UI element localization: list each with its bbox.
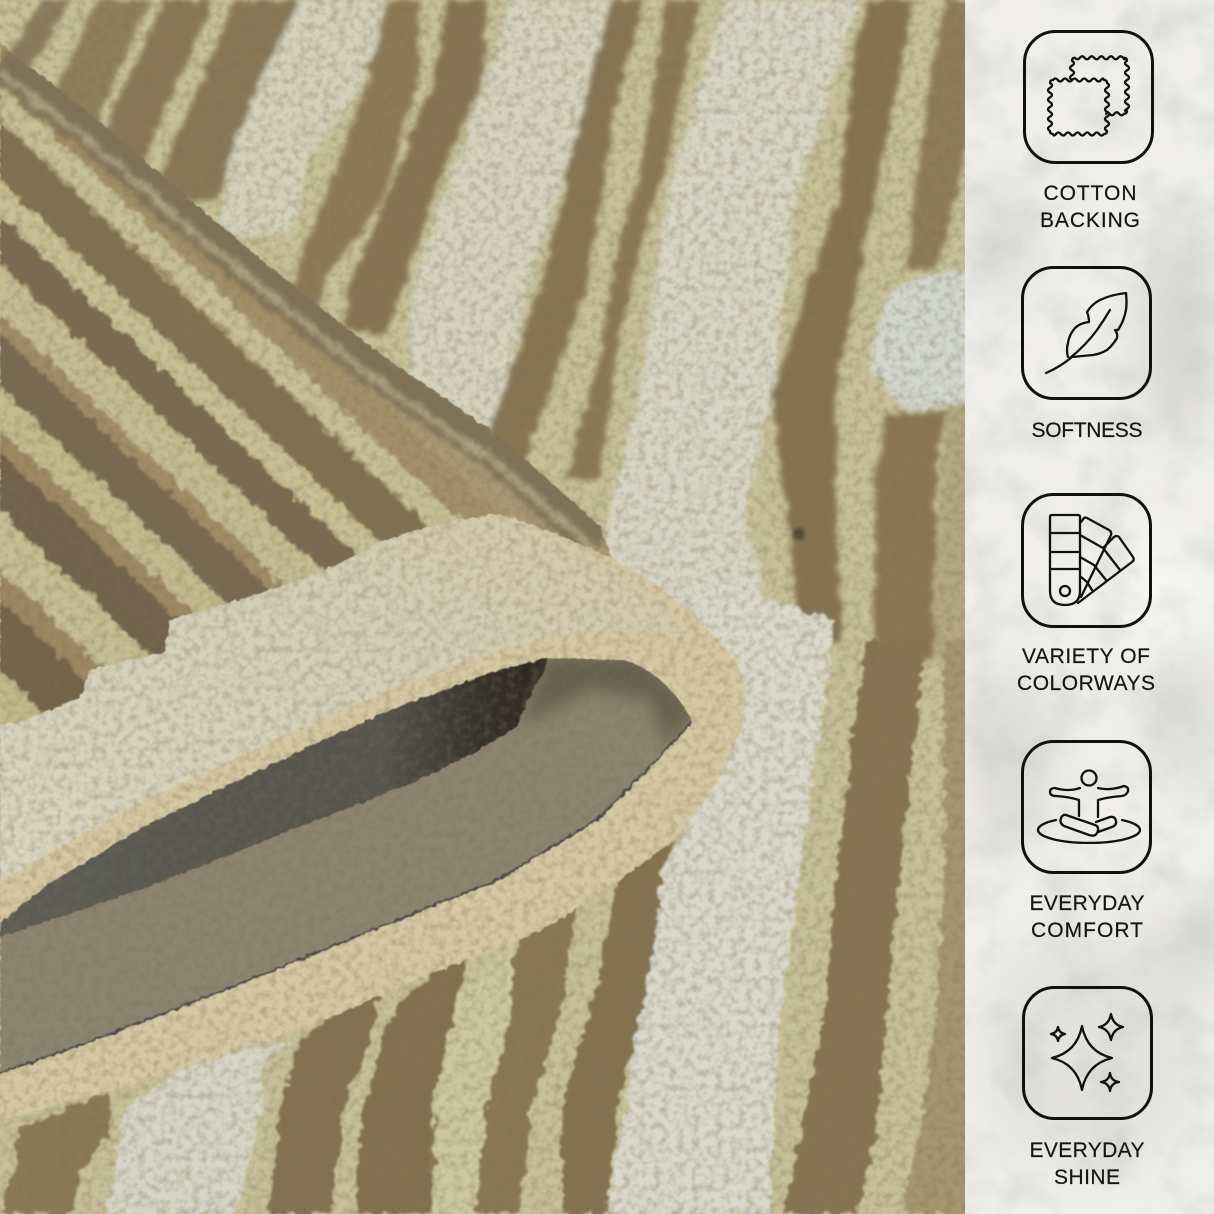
shade inside roll — [520, 655, 700, 745]
wool grain overlay — [0, 0, 965, 1214]
feature: everyday shine — [1024, 988, 1152, 1189]
label: variety of colorways: VARIETY OF — [1022, 645, 1150, 668]
rug photograph — [0, 0, 970, 1214]
label: everyday comfort: COMFORT — [1031, 919, 1143, 942]
feature: cotton backing — [1024, 32, 1152, 232]
feature: softness — [1022, 268, 1150, 442]
dark seam line — [0, 722, 692, 1073]
feature: variety of colorways — [1017, 494, 1155, 695]
label: variety of colorways: COLORWAYS — [1017, 672, 1155, 695]
lower rug stripes — [0, 585, 970, 1214]
icon: colour fan deck — [1022, 494, 1150, 626]
side panel — [965, 0, 1214, 1214]
dark fleck on rug — [793, 528, 805, 540]
icon: sparkles — [1024, 988, 1152, 1118]
icon: feather — [1022, 268, 1150, 398]
rolled edge: tan binding — [0, 514, 746, 1120]
label: variety of colorways — [1017, 645, 1155, 695]
cream border on roll — [0, 514, 695, 880]
label: everyday comfort — [1030, 892, 1144, 942]
icon: meditating figure — [1022, 742, 1150, 872]
roll top rim — [0, 62, 600, 555]
inner beige underside of rug — [0, 658, 692, 1073]
rolled rug face with stripes — [0, 44, 612, 878]
label: everyday comfort: EVERYDAY — [1030, 892, 1144, 915]
icon: cotton swatches — [1024, 32, 1152, 162]
label: everyday shine: EVERYDAY — [1030, 1139, 1144, 1162]
label: cotton backing: COTTON — [1044, 182, 1136, 205]
dark underside shadow — [0, 658, 547, 937]
label: cotton backing: BACKING — [1040, 209, 1140, 232]
label: cotton backing — [1040, 182, 1140, 232]
upper rug stripes — [0, 0, 970, 660]
feature: everyday comfort — [1022, 742, 1150, 942]
label: softness: SOFTNESS — [1032, 419, 1142, 442]
label: everyday shine: SHINE — [1054, 1166, 1120, 1189]
label: everyday shine — [1030, 1139, 1144, 1189]
